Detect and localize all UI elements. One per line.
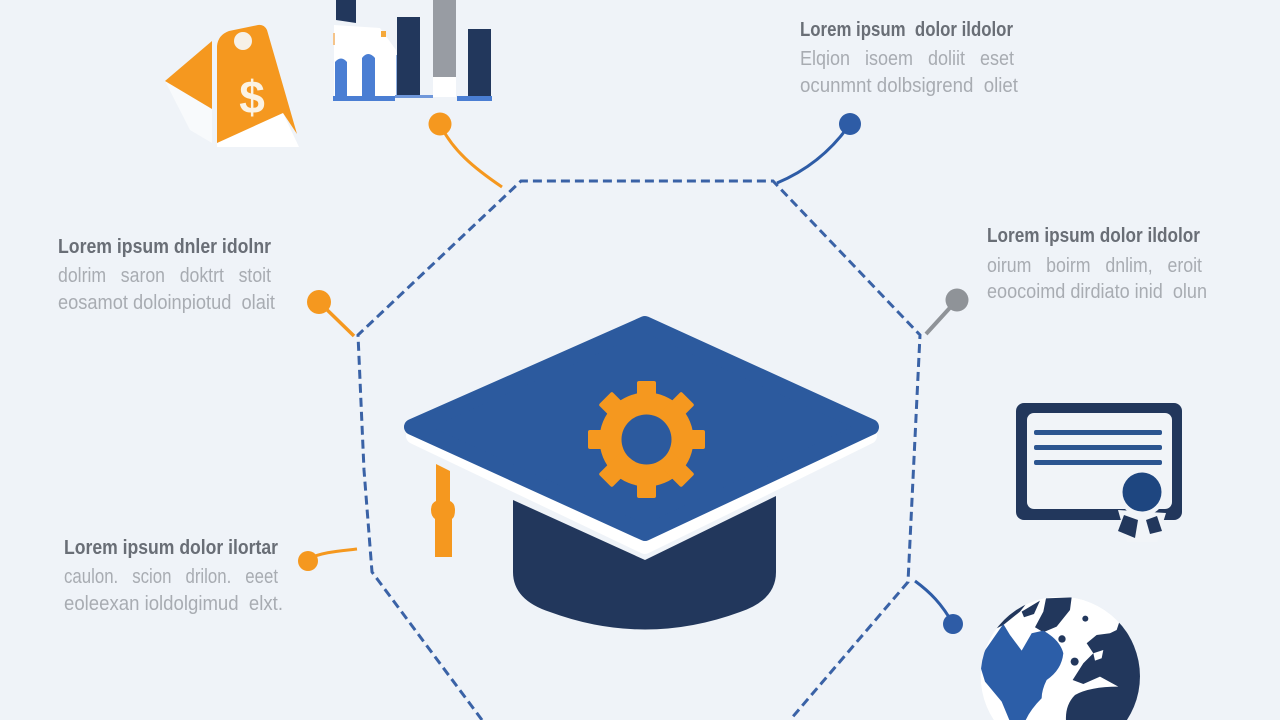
- text block: left: Lorem ipsum dnler idolnr: [58, 236, 271, 258]
- icon: certificate: [1016, 403, 1182, 542]
- text block: left: dolrim saron doktrt stoit: [58, 265, 271, 287]
- text block: right: eoocoimd dirdiato inid olun: [987, 281, 1207, 303]
- gear icon: [588, 381, 705, 498]
- cap board: [412, 324, 871, 533]
- text block: left: eosamot doloinpiotud olait: [58, 292, 275, 314]
- text block: lower left: eoleexan ioldolgimud elxt.: [64, 593, 283, 615]
- cap white edge: [414, 333, 869, 546]
- text block: top right: Lorem ipsum dolor ildolor: [800, 19, 1013, 41]
- icon: globe: [978, 597, 1147, 720]
- text block: top right: Elqion isoem doliit eset: [800, 48, 1014, 70]
- connector: left orange: [307, 290, 354, 336]
- icon: bar chart: [333, 0, 492, 101]
- text block: top right: ocunmnt dolbsigrend oliet: [800, 75, 1018, 97]
- graduation cap: [412, 324, 871, 630]
- text block: right: Lorem ipsum dolor ildolor: [987, 225, 1200, 247]
- text block: lower left: caulon. scion drilon. eeet: [64, 566, 278, 588]
- connector: lower right blue: [915, 581, 963, 634]
- text block: top right: [800, 19, 1018, 97]
- text block: lower left: Lorem ipsum dolor ilortar: [64, 537, 278, 559]
- connector: right grey: [926, 288, 968, 334]
- text block: left: [58, 236, 275, 314]
- icon: price tag: [165, 25, 299, 147]
- connector: top left orange: [428, 112, 502, 187]
- connector: lower left orange: [298, 549, 357, 571]
- text block: lower left: [64, 537, 283, 615]
- connector: top right blue: [777, 113, 861, 183]
- dashed octagon frame: [358, 181, 920, 720]
- text block: right: [987, 225, 1207, 303]
- icon: price tag: $: [239, 71, 265, 123]
- text block: right: oirum boirm dnlim, eroit: [987, 255, 1202, 277]
- tassel: [431, 464, 455, 557]
- cap base: [513, 496, 776, 630]
